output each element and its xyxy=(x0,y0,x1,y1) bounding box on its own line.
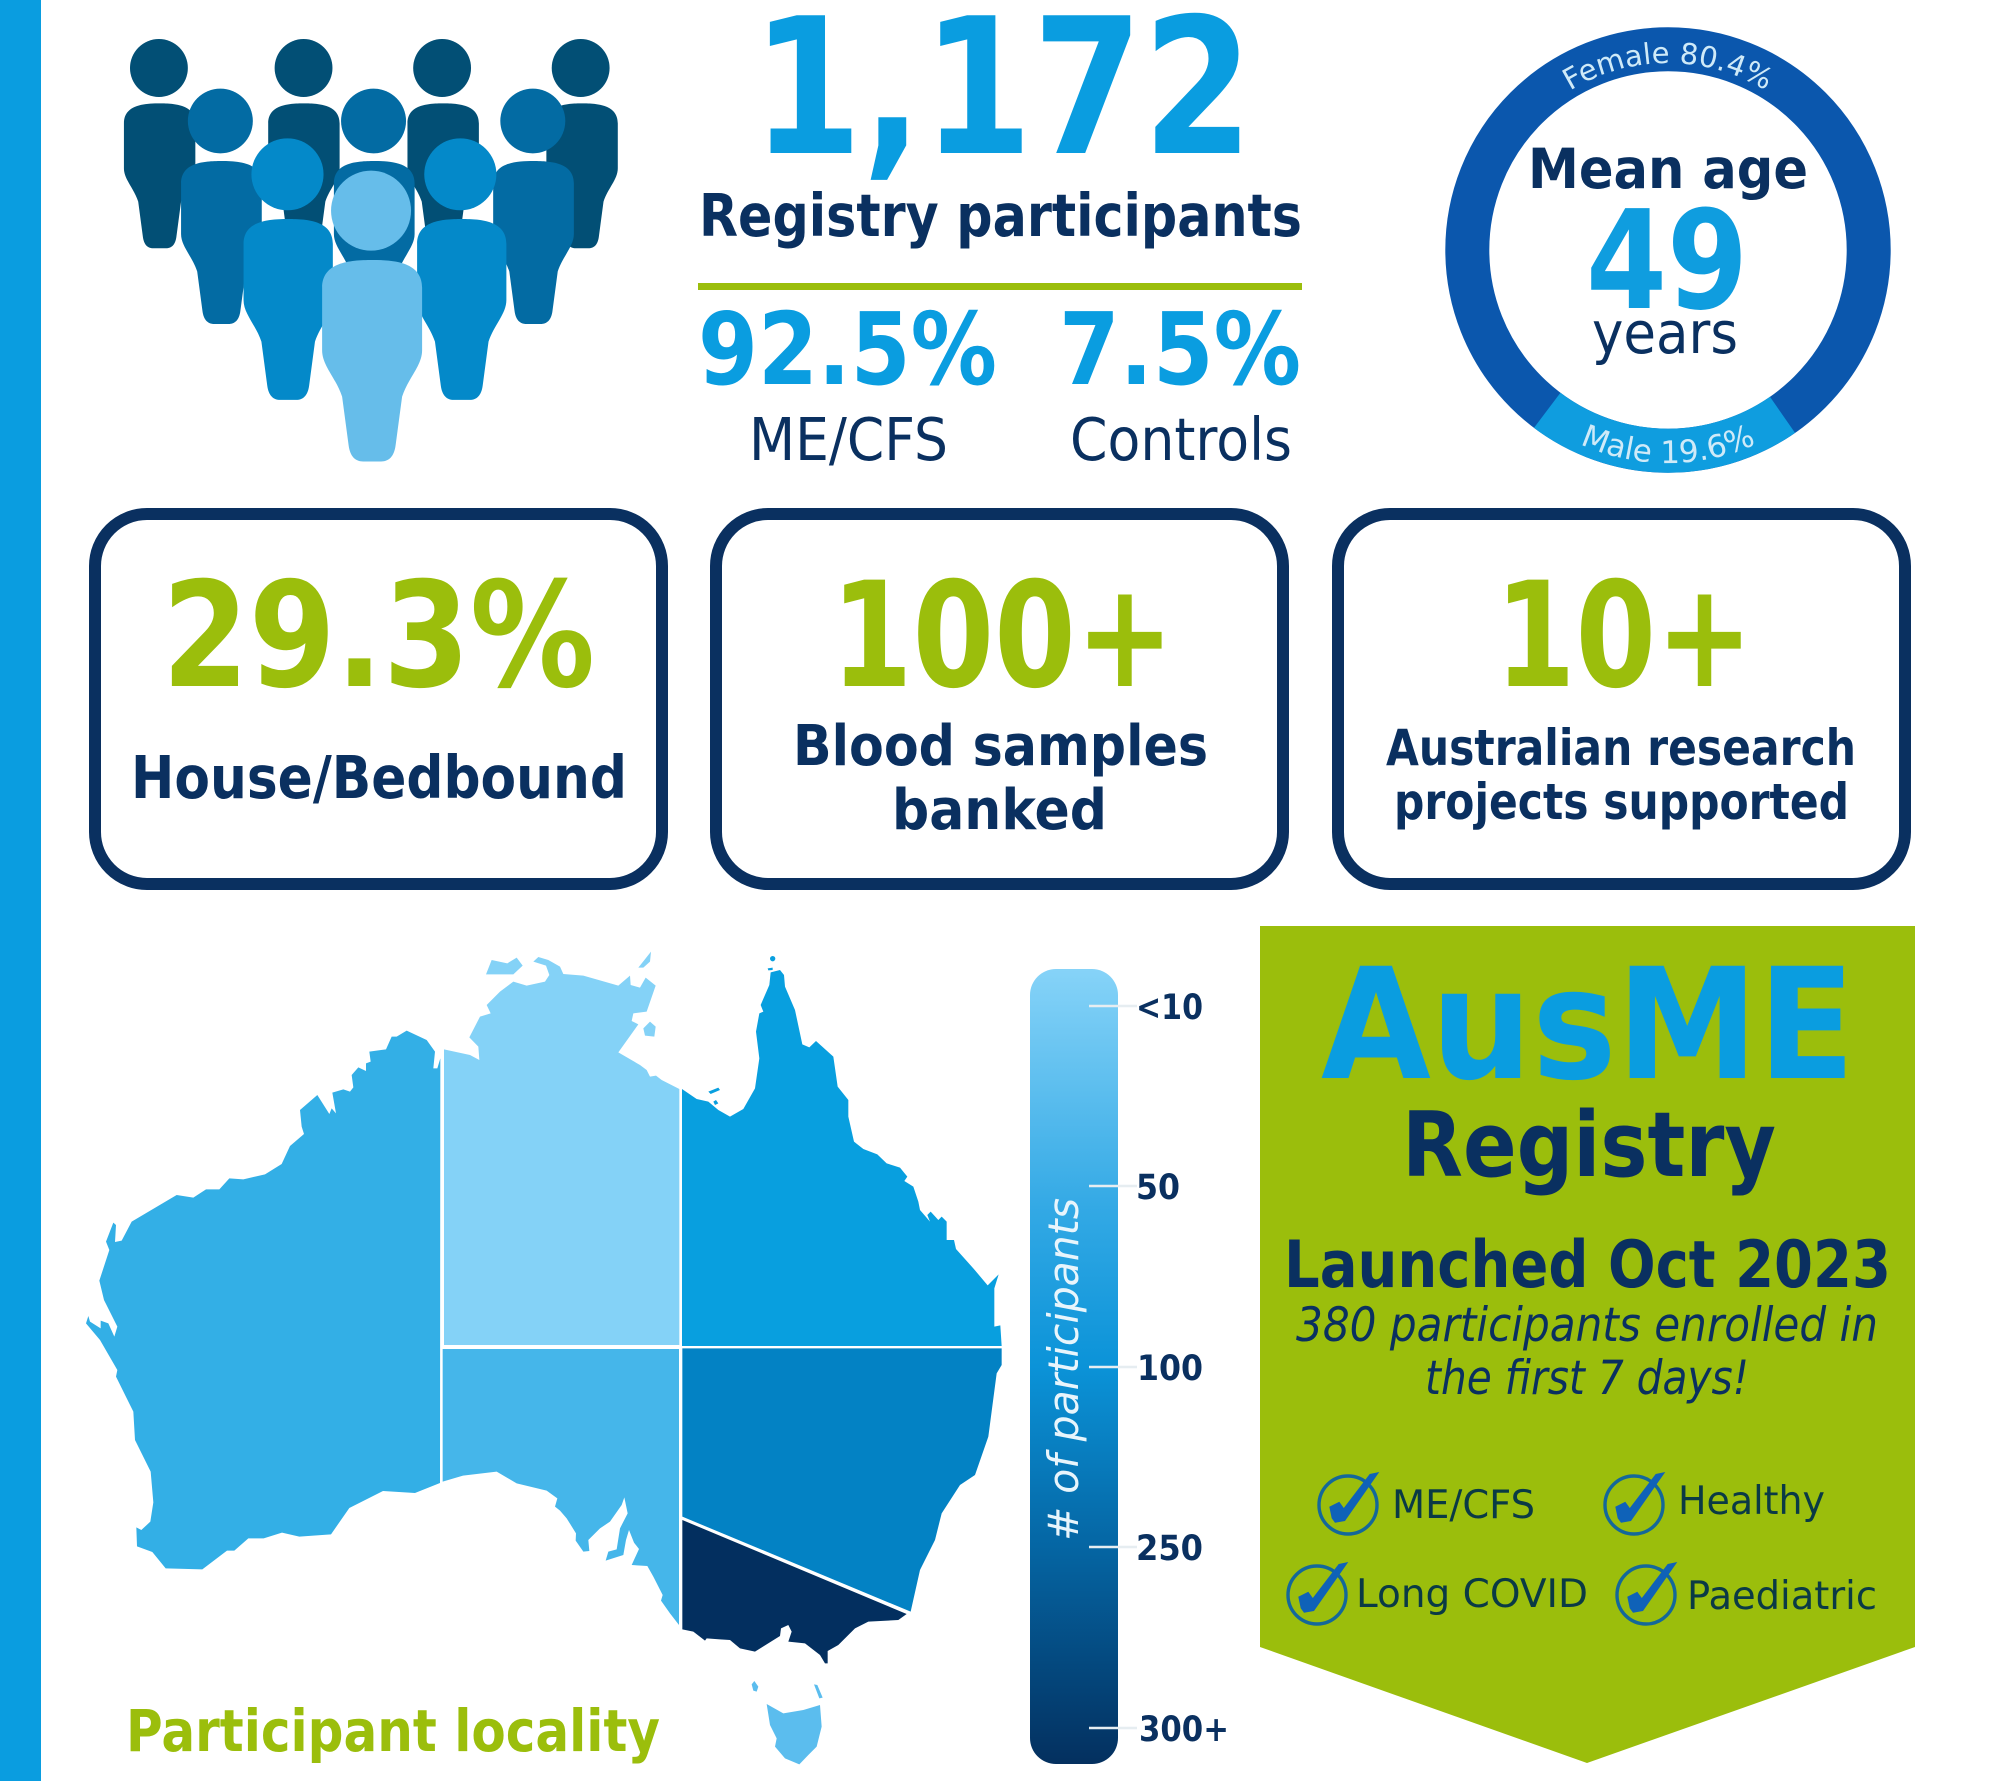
checklist item: ME/CFS: ME/CFS xyxy=(1392,1483,1535,1528)
checklist item: Healthy xyxy=(1605,1472,1825,1534)
donut: gender split and mean age xyxy=(1445,27,1891,473)
state: South Australia xyxy=(443,1349,679,1625)
legend: number of participants scale: <10 xyxy=(1136,988,1203,1028)
donut: gender split and mean age: Mean age xyxy=(1528,137,1808,201)
legend: number of participants scale: 50 xyxy=(1136,1168,1180,1208)
panel: blood samples: banked xyxy=(892,778,1107,843)
state: Queensland xyxy=(682,956,1002,1346)
stat: ME/CFS share: ME/CFS xyxy=(749,405,948,474)
checklist item: Long COVID: Long COVID xyxy=(1356,1572,1588,1617)
panel: house/bedbound: 29.3% xyxy=(162,551,595,721)
map title: Participant locality xyxy=(126,1697,660,1765)
panel: house/bedbound: House/Bedbound xyxy=(131,743,627,812)
donut: gender split and mean age: Male 19.6% xyxy=(1582,424,1754,464)
panel: research projects xyxy=(1338,514,1905,884)
panel: research projects: projects supported xyxy=(1394,773,1849,831)
state: Western Australia xyxy=(86,1031,440,1569)
panel: research projects: 10+ xyxy=(1495,551,1753,721)
left accent bar xyxy=(0,0,41,1781)
donut: gender split and mean age: 49 xyxy=(1586,182,1748,341)
checklist item: Paediatric xyxy=(1617,1562,1877,1624)
checklist item: ME/CFS xyxy=(1319,1472,1535,1534)
legend: number of participants scale: 250 xyxy=(1136,1529,1203,1569)
donut: gender split and mean age: Female 80.4% xyxy=(1562,42,1771,90)
panel: AusME Registry pennant: the first 7 days! xyxy=(1425,1351,1749,1406)
panel: AusME Registry pennant: AusME xyxy=(1321,936,1855,1115)
legend: number of participants scale: # of participants xyxy=(1039,1198,1088,1541)
state: Northern Territory xyxy=(444,952,679,1345)
icon: group of people xyxy=(124,39,618,462)
stat: ME/CFS share xyxy=(698,291,997,474)
map: participant locality by state xyxy=(86,952,1002,1764)
panel: blood samples: Blood samples xyxy=(793,714,1208,779)
panel: AusME Registry pennant: Registry xyxy=(1402,1093,1776,1198)
panel: research projects: Australian research xyxy=(1386,719,1856,777)
stat: controls share: Controls xyxy=(1070,405,1292,474)
state: Tasmania xyxy=(752,1681,823,1764)
checklist item: Long COVID xyxy=(1288,1562,1588,1624)
divider line xyxy=(698,283,1302,290)
legend: number of participants scale: 100 xyxy=(1137,1349,1203,1389)
legend: number of participants scale: 300+ xyxy=(1139,1710,1229,1750)
stat: controls share xyxy=(1059,291,1301,474)
panel: blood samples: 100+ xyxy=(831,551,1174,721)
panel: blood samples xyxy=(716,514,1283,884)
state: Victoria xyxy=(682,1520,907,1663)
panel: AusME Registry pennant xyxy=(1260,926,1915,1763)
panel: AusME Registry pennant: Launched Oct 2023 xyxy=(1284,1228,1891,1303)
panel: AusME Registry pennant: 380 participants enrolled in xyxy=(1296,1298,1878,1353)
stat: controls share: 7.5% xyxy=(1059,291,1301,408)
stat: ME/CFS share: 92.5% xyxy=(698,291,997,408)
checklist item: Paediatric: Paediatric xyxy=(1687,1574,1877,1619)
state: New South Wales xyxy=(682,1348,1002,1612)
legend: number of participants scale xyxy=(1030,969,1229,1764)
checklist item: Healthy: Healthy xyxy=(1678,1479,1825,1524)
donut: gender split and mean age: years xyxy=(1592,299,1738,367)
subheading: registry participants: Registry participants xyxy=(699,181,1302,250)
panel: house/bedbound xyxy=(95,514,662,884)
